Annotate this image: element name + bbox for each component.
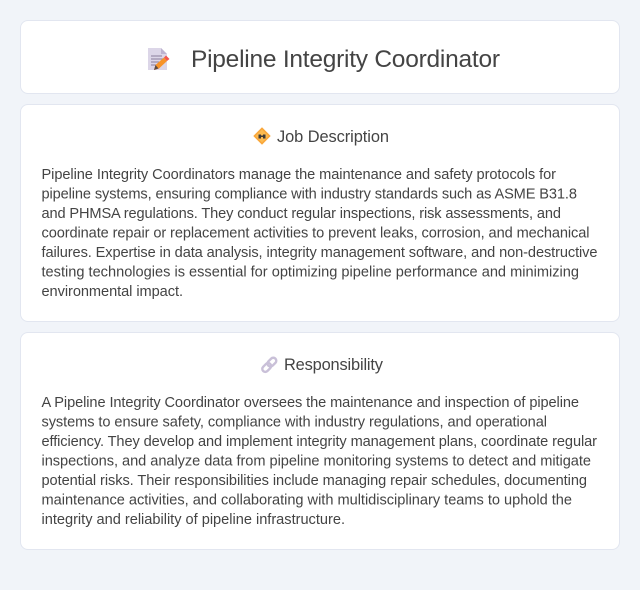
responsibility text: A Pipeline Integrity Coordinator oversees the maintenance and inspection of pipeline <box>42 395 579 411</box>
heading: job description: Job Description <box>277 128 389 146</box>
job description text: and PHMSA regulations. They conduct regular inspections, risk assessments, and <box>42 206 561 222</box>
job description text: environmental impact. <box>42 284 183 300</box>
panel: job description <box>20 104 620 322</box>
responsibility text: maintenance activities, and collaborating with multidisciplinary teams to uphold the <box>42 492 572 508</box>
job description text: coordinate repair or replacement activities to prevent leaks, corrosion, and mechanical <box>42 226 590 242</box>
panel: title card <box>20 20 620 94</box>
panel: responsibility <box>20 332 620 550</box>
job description text: failures. Expertise in data analysis, integrity management software, and non-destructive <box>42 245 598 261</box>
icon: memo with pencil <box>148 48 170 70</box>
icon: orange diamond <box>253 127 271 145</box>
job description text: Pipeline Integrity Coordinators manage the maintenance and safety protocols for <box>42 167 556 183</box>
job description text <box>42 167 598 300</box>
title: Pipeline Integrity Coordinator <box>191 46 500 73</box>
responsibility text: inspections, and analyze data from pipeline monitoring systems to detect and mitigate <box>42 454 591 470</box>
heading: responsibility: Responsibility <box>284 356 384 374</box>
icon: chain link <box>261 356 278 374</box>
responsibility text: integrity and reliability of pipeline infrastructure. <box>42 512 345 528</box>
responsibility text: potential risks. Their responsibilities include managing repair schedules, documenting <box>42 473 587 489</box>
job description text: pipeline systems, ensuring compliance with industry standards such as ASME B31.8 <box>42 186 577 202</box>
job description text: testing technologies is essential for optimizing pipeline performance and minimizing <box>42 264 579 280</box>
responsibility text: systems to ensure safety, compliance with industry regulations, and operational <box>42 414 547 430</box>
responsibility text: efficiency. They develop and implement integrity management plans, coordinate regular <box>42 434 597 450</box>
